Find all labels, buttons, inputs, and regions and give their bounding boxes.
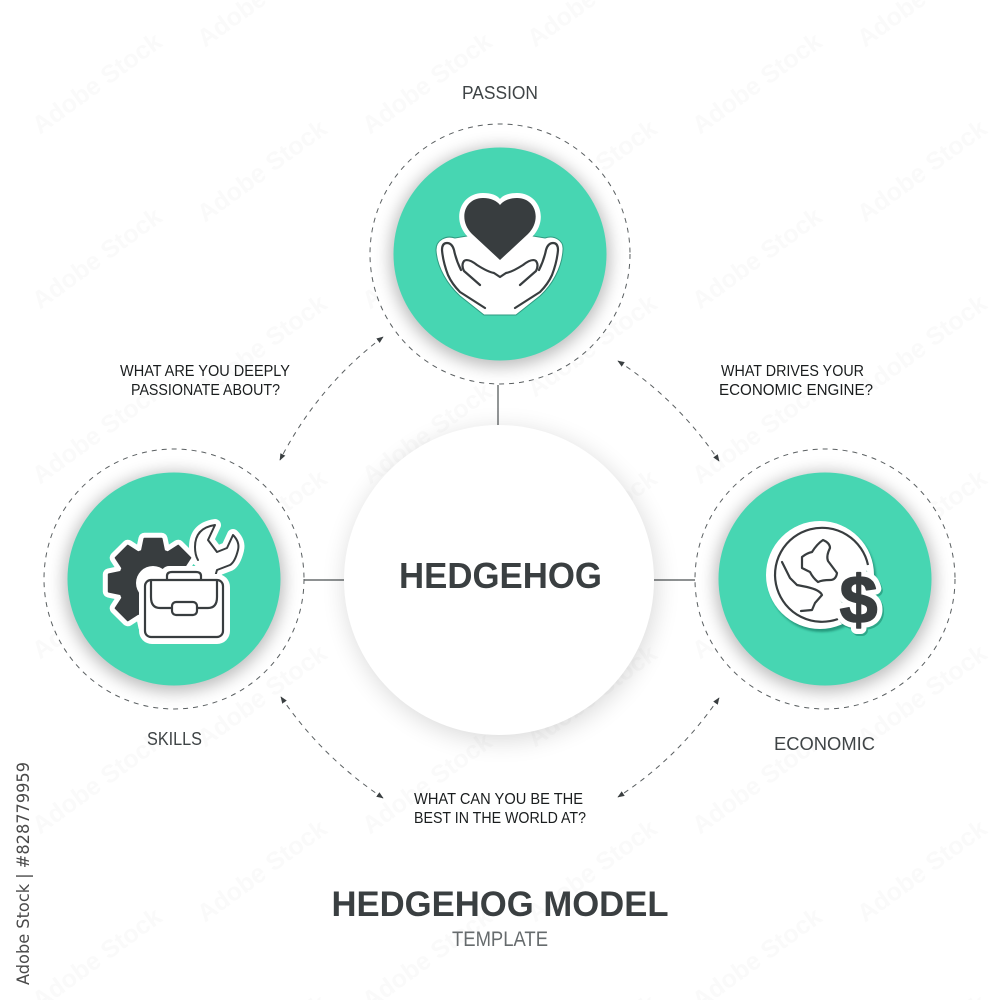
label: economic: ECONOMIC <box>774 734 875 754</box>
arrow: passion to economic <box>618 361 719 461</box>
text: what are you deeply passionate about <box>120 363 290 399</box>
title: HEDGEHOG MODEL <box>332 885 668 924</box>
icon: globe with dollar: $ <box>841 564 879 640</box>
icon: heart in hands <box>436 193 563 315</box>
icon: globe with dollar: $ <box>840 562 877 638</box>
central circle: hedgehog: HEDGEHOG <box>399 555 602 596</box>
panel: economic <box>695 449 955 709</box>
icon: globe with dollar: $ <box>840 562 877 638</box>
central circle: hedgehog <box>344 425 655 739</box>
panel: passion <box>370 124 630 384</box>
text: what can you be the best in the world at: BEST IN THE WORLD AT? <box>414 810 586 827</box>
label: skills: SKILLS <box>147 729 202 749</box>
panel: skills <box>44 449 304 709</box>
icon: globe with dollar <box>766 521 879 640</box>
text: what are you deeply passionate about: WHAT ARE YOU DEEPLY <box>120 363 290 380</box>
icon: gear, wrench and briefcase <box>109 525 238 644</box>
text: what drives your economic engine: WHAT DRIVES YOUR <box>721 363 864 380</box>
text: what drives your economic engine <box>719 363 873 399</box>
arrow: economic to best in the world <box>618 698 719 797</box>
text: what can you be the best in the world at: WHAT CAN YOU BE THE <box>414 791 583 808</box>
stock image credit: Adobe Stock | #828779959 <box>14 762 34 985</box>
subtitle: TEMPLATE <box>452 928 548 951</box>
arrow: skills to best in the world <box>281 697 383 798</box>
text: what are you deeply passionate about: PASSIONATE ABOUT? <box>131 382 280 399</box>
arrow: passion to skills <box>280 337 383 460</box>
label: passion: PASSION <box>462 83 538 103</box>
connector lines <box>304 385 696 580</box>
text: what drives your economic engine: ECONOMIC ENGINE? <box>719 382 873 399</box>
text: what can you be the best in the world at <box>414 791 586 827</box>
